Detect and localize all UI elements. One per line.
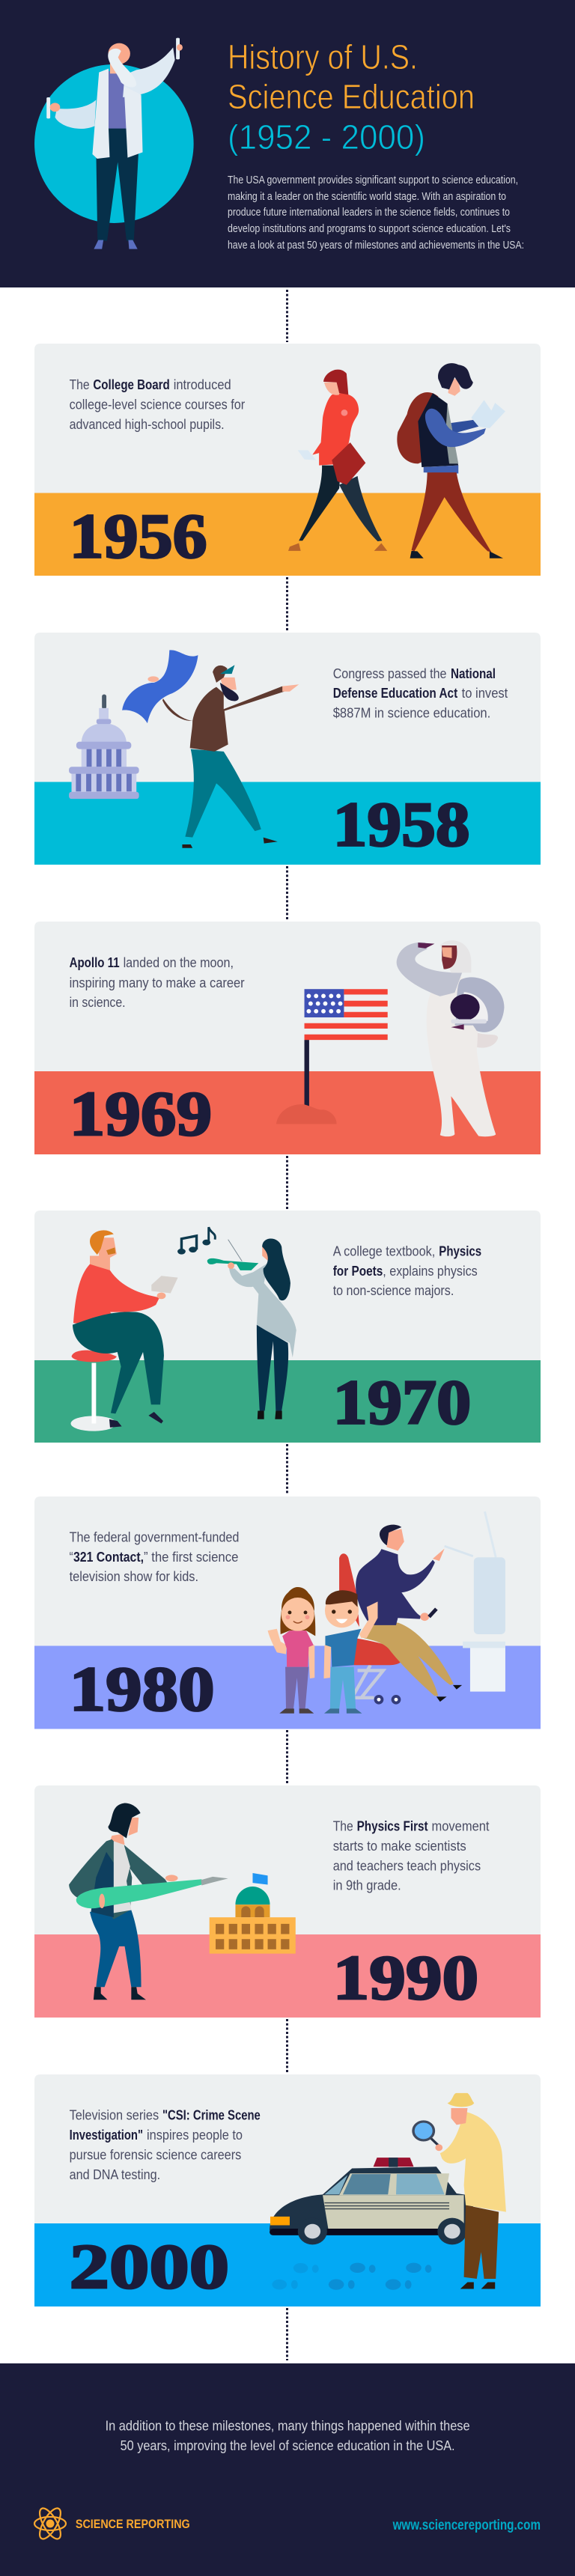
brand name: SCIENCE REPORTING (76, 2517, 190, 2531)
text: 1970 description: , explains physics (383, 1263, 478, 1279)
text: 1980 description: “ (70, 1549, 73, 1565)
year: 1969: 1969 (70, 1079, 212, 1149)
panel: 1990 (34, 1785, 541, 2018)
text: 1970 description: A college textbook, (333, 1243, 435, 1259)
text: 1980 description: The federal government-funded (70, 1529, 239, 1544)
text: 1956 description: college-level science courses for (70, 397, 245, 412)
illustration: police car, footprints and detective (270, 2093, 506, 2290)
text: 1958 description: to invest (462, 685, 508, 701)
text: 1970 description: for Poets (333, 1263, 383, 1279)
text: 1990 description: Physics First (357, 1818, 428, 1834)
text: 1958 description: Congress passed the (333, 666, 446, 681)
text: 1956 description: advanced high-school pupils. (70, 416, 225, 432)
year: 1990: 1990 (333, 1943, 478, 2013)
text: 1958 description: National (451, 666, 496, 681)
text: 1969 description: landed on the moon, (124, 954, 234, 970)
text: 1980 description: 321 Contact, (73, 1549, 144, 1565)
text: 1990 description: in 9th grade. (333, 1878, 401, 1893)
intro text: develop institutions and programs to support science education. Let's (228, 223, 511, 235)
text: 1990 description: and teachers teach physics (333, 1858, 481, 1873)
timeline dotted line (286, 290, 288, 2360)
year: 1958: 1958 (333, 790, 470, 860)
panel: footer (0, 2363, 575, 2576)
text: 1970 description: to non-science majors. (333, 1282, 454, 1298)
text: 2000 description: inspires people to (147, 2127, 243, 2143)
footer text: 50 years, improving the level of science education in the USA. (121, 2438, 455, 2453)
footer text (106, 2418, 470, 2453)
text: 1969 description: in science. (70, 994, 126, 1010)
illustration: capitol and man with flag (69, 650, 299, 848)
text: 1990 description: starts to make scientists (333, 1838, 466, 1854)
text: 1990 description: movement (431, 1818, 490, 1834)
intro text: produce future international leaders in the science fields, continues to (228, 207, 510, 219)
title: (1952 - 2000) (228, 118, 425, 156)
title (228, 37, 475, 156)
text: 1956 description: College Board (93, 377, 170, 392)
intro text: making it a leader on the scientific world stage. With an aspiration to (228, 191, 506, 203)
website url: www.sciencereporting.com (392, 2518, 541, 2533)
panel: 1969 (34, 922, 541, 1154)
text: 2000 description: "CSI: Crime Scene (162, 2107, 261, 2123)
title: History of U.S. (228, 37, 418, 76)
panel: 1958 (34, 633, 541, 865)
illustration: two students walking (288, 363, 505, 558)
intro text (228, 174, 524, 252)
illustration: scientist in teal circle (34, 38, 194, 249)
intro text: have a look at past 50 years of milestones and achievements in the USA: (228, 240, 524, 252)
panel: header (0, 0, 575, 287)
text: 1956 description: The (70, 377, 90, 392)
footer text: In addition to these milestones, many things happened within these (106, 2418, 470, 2433)
text: 1990 description (333, 1818, 490, 1893)
text: 2000 description: and DNA testing. (70, 2167, 160, 2182)
year: 1956: 1956 (70, 502, 207, 572)
panel: 2000 (34, 2074, 541, 2306)
illustration: woman with giant pen and school building (69, 1803, 296, 2000)
text: 1980 description: ” the first science (144, 1549, 238, 1565)
text: 1969 description (70, 954, 245, 1010)
text: 1980 description: television show for kids. (70, 1568, 198, 1584)
title: Science Education (228, 77, 475, 116)
text: 2000 description (70, 2107, 261, 2182)
icon: atom logo (34, 2506, 66, 2542)
text: 1969 description: Apollo 11 (70, 954, 120, 970)
text: 1958 description (333, 666, 508, 721)
text: 1990 description: The (333, 1818, 353, 1834)
text: 2000 description: Investigation" (70, 2127, 143, 2143)
text: 1970 description (333, 1243, 481, 1298)
text: 1969 description: inspiring many to make a career (70, 975, 245, 990)
illustration: man at television with two kids (268, 1511, 505, 1714)
panel: 1956 (34, 344, 541, 576)
text: 2000 description: Television series (70, 2107, 159, 2123)
text: 1958 description: $887M in science education. (333, 705, 490, 721)
text: 1970 description: Physics (439, 1243, 481, 1259)
text: 1956 description (70, 377, 245, 432)
intro text: The USA government provides significant support to science education, (228, 174, 518, 186)
year: 2000: 2000 (70, 2232, 229, 2302)
year: 1980: 1980 (70, 1654, 215, 1724)
illustration: flag and astronaut (276, 940, 504, 1136)
panel: 1970 (34, 1211, 541, 1443)
year: 1970: 1970 (333, 1368, 471, 1438)
text: 1958 description: Defense Education Act (333, 685, 457, 701)
text: 2000 description: pursue forensic science careers (70, 2146, 241, 2162)
panel: 1980 (34, 1496, 541, 1729)
text: 1956 description: introduced (174, 377, 231, 392)
illustration: man reading and violinist (71, 1227, 296, 1431)
text: 1980 description (70, 1529, 239, 1584)
